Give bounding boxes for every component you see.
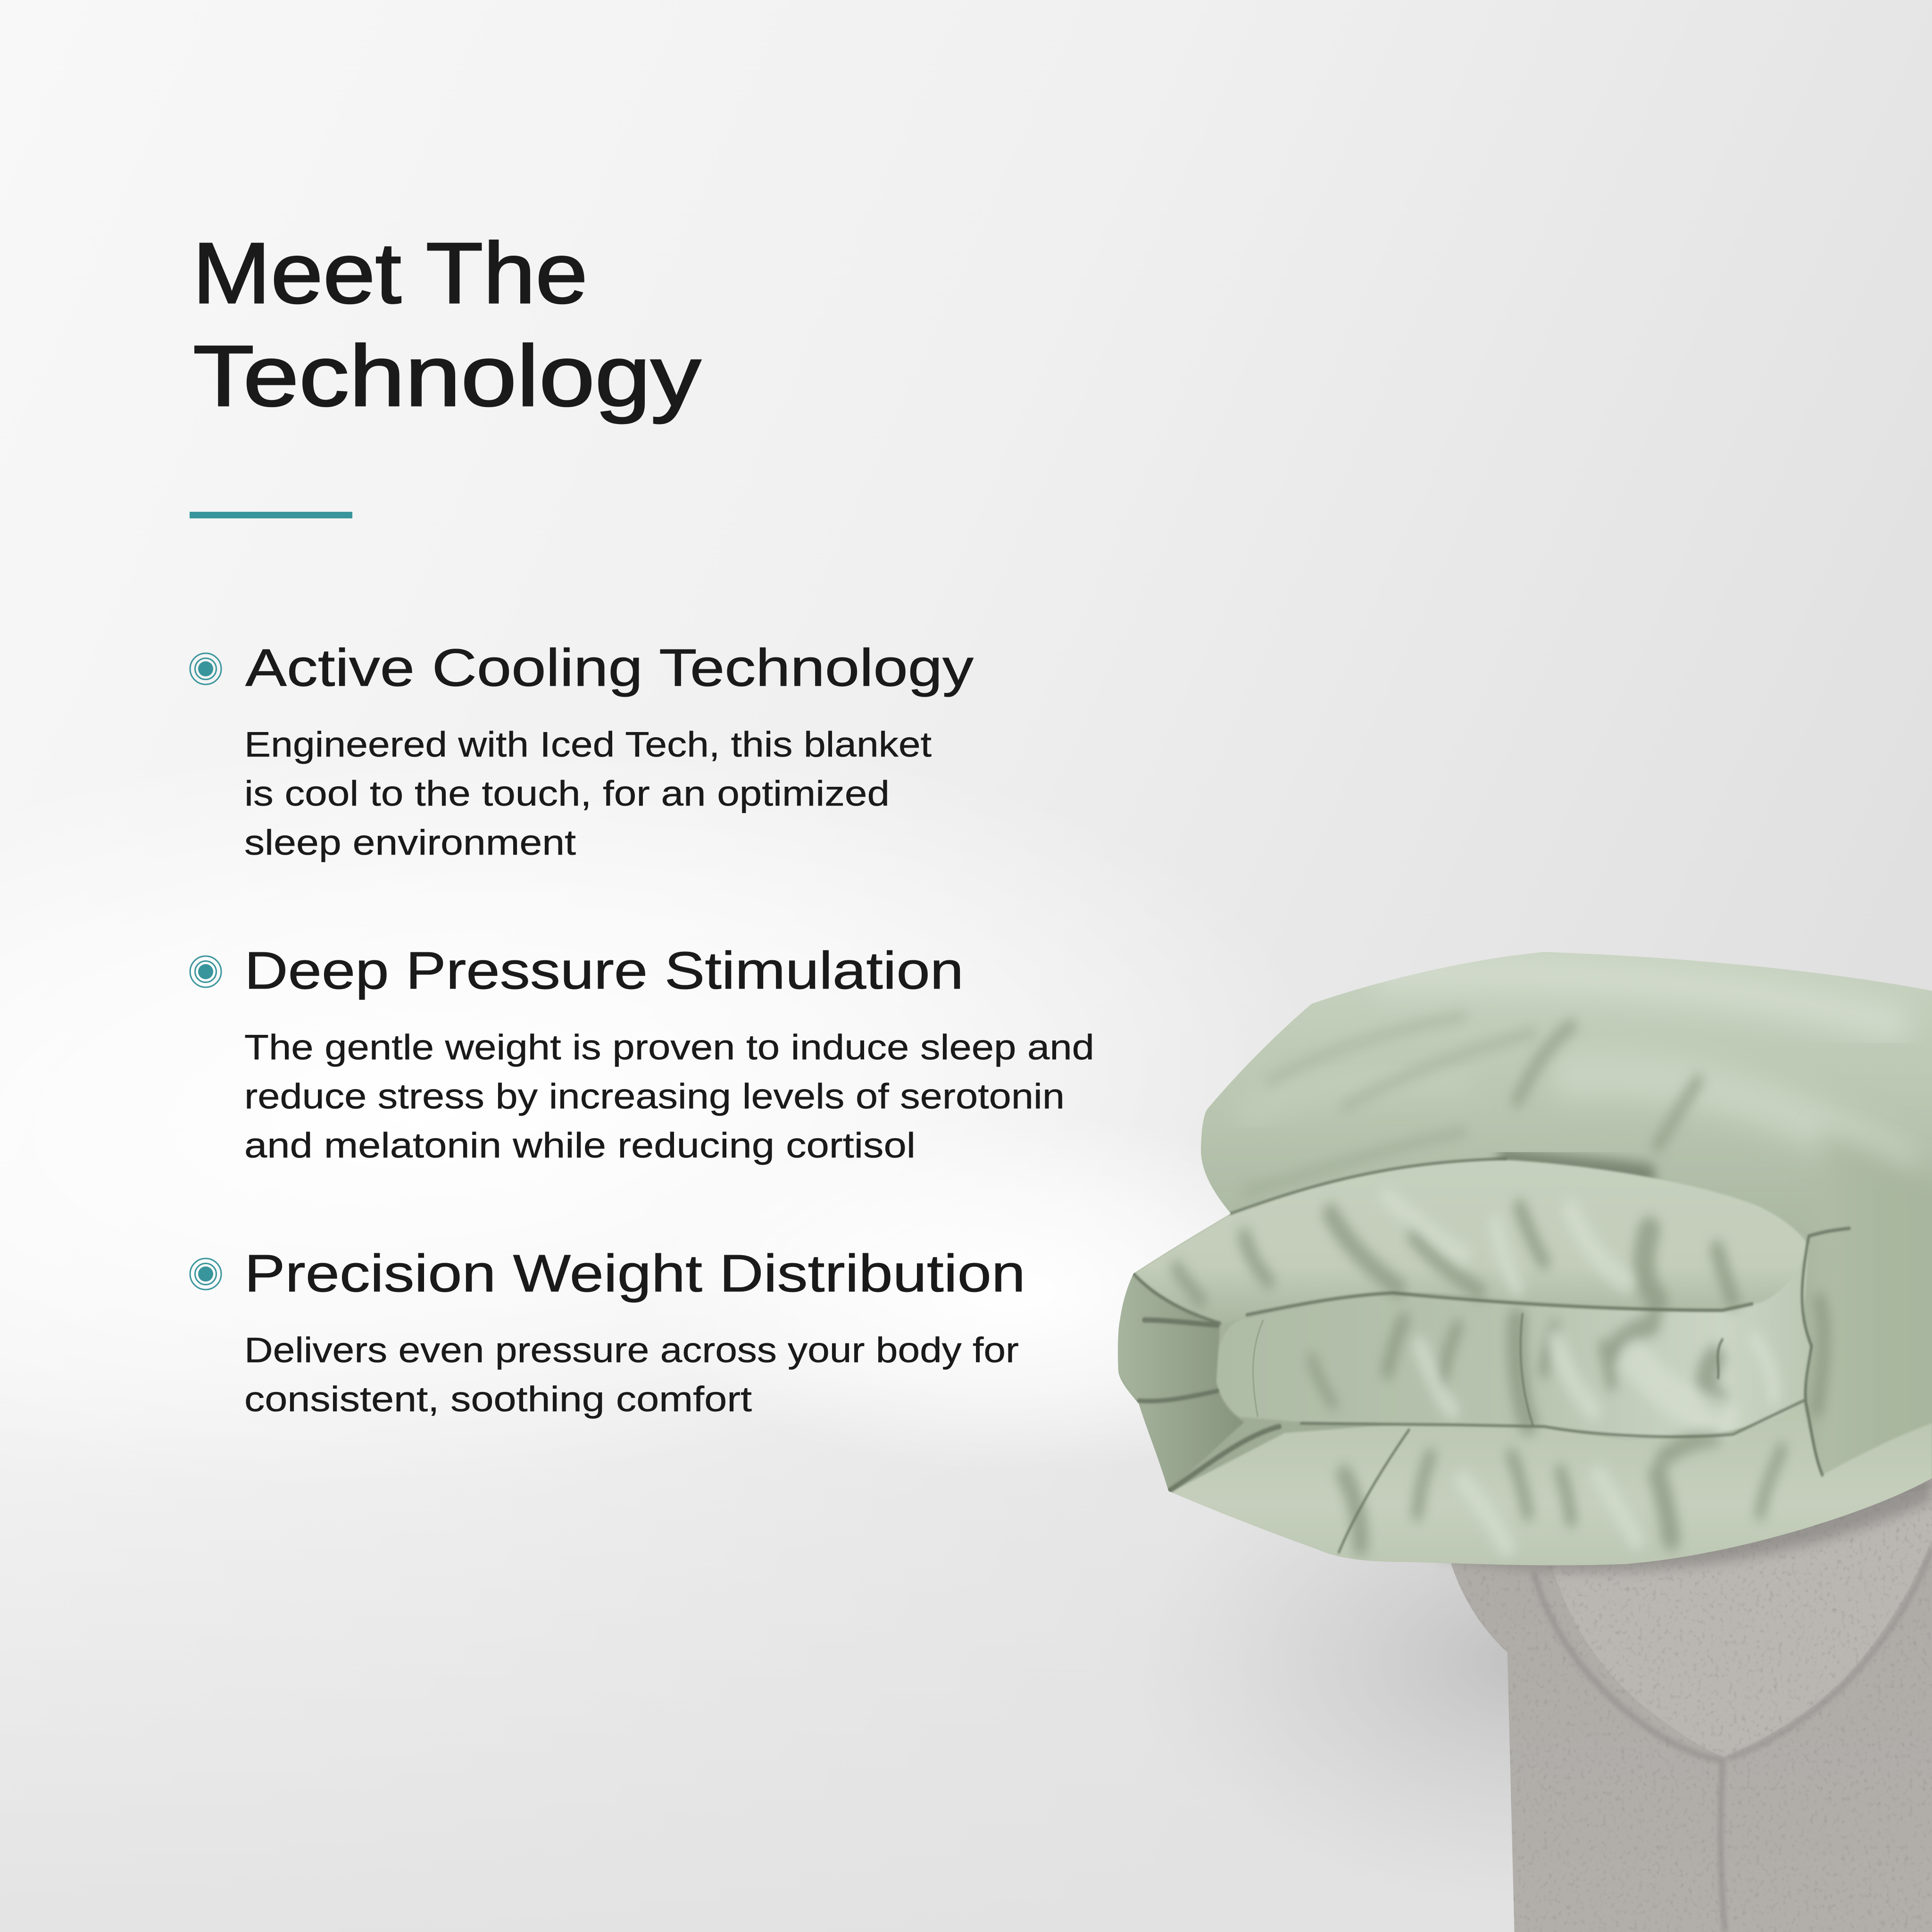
blanket: soft highlights	[1387, 1197, 1774, 1546]
title: Meet The	[192, 225, 588, 321]
heading: precision weight distribution: Precision Weight Distribution	[244, 1244, 1025, 1303]
blanket: lower fold	[1166, 1401, 1932, 1572]
heading: active cooling technology: Active Cooling Technology	[245, 638, 974, 697]
title: Technology	[193, 327, 701, 424]
body text: active cooling technology: is cool to the touch, for an optimized	[244, 774, 890, 813]
body text: deep pressure stimulation: reduce stress by increasing levels of serotonin	[244, 1076, 1065, 1116]
concrete sculpture stand	[1436, 1475, 1932, 1932]
body text: active cooling technology: sleep environment	[244, 823, 576, 862]
icon: target bullet 3	[190, 1258, 221, 1290]
icon: target bullet 1	[190, 653, 221, 684]
feature: deep pressure stimulation	[190, 941, 1094, 1165]
folded green weighted blanket	[1085, 920, 1932, 1572]
body text: precision weight distribution	[244, 1330, 1019, 1419]
title accent divider	[190, 512, 352, 518]
blanket: left cavity shadow	[1117, 1274, 1244, 1491]
blanket: top fold soft shading	[1247, 973, 1895, 1191]
icon: target bullet 2	[190, 956, 221, 987]
body text: deep pressure stimulation: The gentle weight is proven to induce sleep and	[244, 1027, 1094, 1067]
heading: deep pressure stimulation: Deep Pressure Stimulation	[244, 941, 964, 1000]
body text: precision weight distribution: Delivers even pressure across your body for	[244, 1330, 1019, 1370]
body text: deep pressure stimulation	[244, 1027, 1094, 1165]
blanket: inner rolled layer	[1216, 1242, 1812, 1440]
blanket: upper rolled layer	[1133, 1160, 1809, 1323]
blanket: sharp dark creases	[1133, 1158, 1849, 1552]
body text: active cooling technology: Engineered with Iced Tech, this blanket	[244, 724, 932, 764]
title	[192, 225, 701, 424]
feature: active cooling technology	[190, 638, 974, 862]
blanket: top fold	[1085, 920, 1932, 1572]
blanket: right wrap-around fold	[1811, 1130, 1932, 1474]
body text: precision weight distribution: consistent, soothing comfort	[244, 1379, 752, 1419]
blanket: soft dark wrinkles	[1177, 1207, 1824, 1546]
body text: deep pressure stimulation: and melatonin while reducing cortisol	[244, 1125, 916, 1165]
body text: active cooling technology	[244, 724, 932, 862]
feature: precision weight distribution	[190, 1244, 1025, 1419]
blanket: hem seam	[1253, 1320, 1263, 1417]
